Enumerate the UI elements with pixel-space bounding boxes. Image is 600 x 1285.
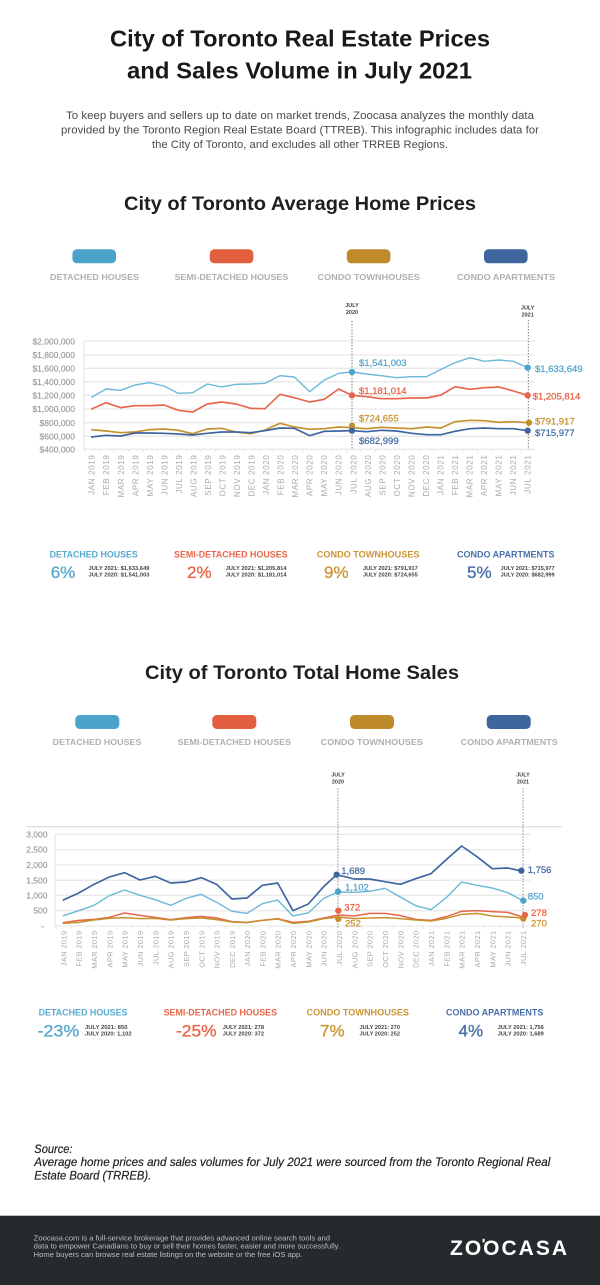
y axis labels [32,336,75,454]
line: condo apartments [63,846,521,911]
x axis month labels: AUG 2019 [167,930,176,968]
legend: average home prices: SEMI-DETACHED HOUSES [175,272,289,282]
value labels: 1,102 [345,883,369,894]
x axis month labels: OCT 2019 [218,454,228,496]
marker date labels [331,773,530,786]
x axis month labels: JAN 2020 [262,454,271,495]
x axis month labels: JAN 2021 [427,930,436,966]
value labels: 850 [528,892,544,903]
x axis month labels: JUL 2020 [335,930,344,965]
y axis labels: 500 [33,906,48,916]
y axis labels: - [41,921,44,931]
value labels: $791,917 [535,416,575,427]
stat: detached houses: 6% [51,563,75,582]
footer text: Zoocasa.com is a full-service brokerage that provides advanced online search tools and [34,1233,330,1242]
stat: semi-detached houses: 2% [187,563,212,582]
legend: total home sales: CONDO TOWNHOUSES [321,737,423,747]
y axis labels: 2,000 [26,860,48,870]
legend: total home sales: SEMI-DETACHED HOUSES [178,737,291,747]
line chart: average home prices [32,303,583,498]
stat: condo apartments: JULY 2020: 1,689 [498,1032,544,1038]
legend: total home sales: DETACHED HOUSES [53,737,142,747]
x axis month labels: JUL 2021 [524,454,533,494]
stat: condo townhouses: 9% [324,563,349,582]
legend: total home sales: CONDO APARTMENTS [461,737,558,747]
x axis month labels: DEC 2020 [412,930,421,968]
value labels: 1,756 [528,865,551,876]
stats row: total home sales [38,1008,544,1041]
x axis month labels: AUG 2019 [189,454,198,497]
stat: condo apartments [457,549,555,582]
footer text: data to empower Canadians to buy or sell their homes faster, easier and more successfully. [34,1242,340,1250]
x axis month labels: FEB 2020 [258,930,267,967]
x axis month labels: JUL 2019 [151,930,160,965]
stat: detached houses: JULY 2021: $1,633,649 [88,566,150,572]
marker date labels [345,303,535,319]
x axis month labels: DEC 2019 [248,454,256,497]
x axis month labels: FEB 2020 [277,454,286,495]
x axis month labels: JAN 2019 [88,454,97,495]
x axis month labels: MAR 2020 [274,930,283,969]
x axis month labels: APR 2019 [105,930,114,968]
stat: detached houses [50,549,150,582]
legend: average home prices: CONDO APARTMENTS [457,272,555,282]
x axis month labels: MAY 2019 [121,930,130,968]
x axis month labels: APR 2020 [289,930,298,968]
x axis month labels: JUN 2020 [320,930,329,967]
x axis month labels: JAN 2021 [436,454,445,495]
marker date labels: 2021 [517,780,529,786]
y axis labels [26,830,48,931]
x axis month labels: MAR 2021 [458,930,467,969]
stat: detached houses: JULY 2020: $1,541,003 [88,573,150,579]
stat: detached houses: JULY 2020: 1,102 [85,1032,132,1038]
value labels: $682,999 [359,436,399,447]
x axis month labels: JUN 2019 [160,454,169,495]
stats row: average home prices [50,549,555,582]
value labels [341,865,551,929]
marker date labels: JULY [331,773,345,779]
stat: detached houses [38,1008,132,1041]
value labels: $1,541,003 [359,358,407,369]
heading: total home sales: City of Toronto Total Home Sales [145,662,459,684]
stat: semi-detached houses: SEMI-DETACHED HOUSES [164,1008,277,1018]
x axis month labels: DEC 2020 [422,454,431,497]
line: detached houses [63,882,523,916]
stat: condo apartments: JULY 2020: $682,999 [501,573,555,579]
value labels: 1,689 [341,866,365,877]
y axis labels: $800,000 [40,418,75,428]
marker date labels: 2020 [332,780,344,786]
source note: Source: [34,1142,72,1156]
marker date labels: 2021 [522,313,534,319]
value labels: $1,181,014 [359,386,407,397]
line chart: total home sales [26,773,562,969]
logo: Zoocasa: ZOOCASA [450,1237,567,1260]
stat: condo apartments: CONDO APARTMENTS [457,549,554,559]
x axis month labels: NOV 2019 [213,930,222,968]
x axis month labels: APR 2020 [306,454,315,496]
x axis month labels: JUN 2020 [335,454,344,495]
marker date labels: JULY [516,773,530,779]
stat: condo townhouses: JULY 2021: 270 [360,1025,400,1031]
x axis month labels: FEB 2019 [75,930,84,967]
y axis labels: $1,600,000 [32,364,75,374]
x axis month labels: JUL 2020 [349,454,358,494]
legend: average home prices: DETACHED HOUSES [50,272,139,282]
stat: semi-detached houses: -25% [176,1022,217,1041]
x axis month labels: SEP 2020 [366,930,375,967]
intro text: To keep buyers and sellers up to date on market trends, Zoocasa analyzes the monthly data [66,110,535,122]
intro text: provided by the Toronto Region Real Estate Board (TTREB). This infographic includes data for [61,124,539,136]
y axis labels: $1,800,000 [32,350,75,360]
stat: condo apartments: JULY 2021: $715,977 [501,566,555,572]
y axis labels: $1,200,000 [32,390,75,400]
footer text [34,1233,340,1259]
x axis month labels: NOV 2020 [407,454,416,497]
x axis month labels: SEP 2020 [378,454,387,496]
stat: condo townhouses: 7% [320,1022,345,1041]
title [110,26,490,84]
title: City of Toronto Real Estate Prices [110,26,490,52]
stat: condo apartments: CONDO APARTMENTS [446,1008,543,1018]
stat: detached houses: DETACHED HOUSES [50,549,138,559]
footer text: Home buyers can browse real estate listings on the website or the free iOS app. [34,1250,302,1259]
x axis month labels: JUN 2021 [509,454,518,495]
x axis month labels: OCT 2020 [393,454,402,496]
value labels: $1,633,649 [535,364,583,375]
intro text [61,110,539,151]
x axis month labels: FEB 2021 [442,930,451,967]
y axis labels: 1,000 [26,890,48,900]
legend: average home prices: CONDO TOWNHOUSES [318,272,420,282]
y axis labels: $1,400,000 [32,377,75,387]
x axis month labels: MAY 2020 [320,454,329,496]
x axis month labels: AUG 2020 [364,454,373,497]
stat: condo townhouses [317,549,420,582]
stat: semi-detached houses: JULY 2021: 278 [223,1025,264,1031]
x axis month labels: APR 2019 [131,454,140,496]
stat: condo apartments [446,1008,544,1041]
source note: Average home prices and sales volumes for July 2021 were sourced from the Toronto Regional Real [33,1155,551,1169]
stat: condo apartments: 5% [467,563,492,582]
legend: average home prices [50,249,555,282]
y axis labels: $1,000,000 [32,404,75,414]
line: semi-detached houses [63,911,523,923]
x axis month labels: FEB 2021 [451,454,460,495]
y axis labels: 3,000 [26,830,48,840]
marker date labels: JULY [521,305,535,311]
x axis month labels: OCT 2020 [381,930,390,968]
x axis month labels: APR 2021 [480,454,489,496]
stat: condo townhouses: CONDO TOWNHOUSES [317,549,420,559]
x axis month labels: AUG 2020 [350,930,359,968]
x axis month labels: MAY 2021 [488,930,497,968]
x axis month labels: MAR 2019 [90,930,99,969]
source note [33,1142,551,1182]
x axis month labels: JUL 2021 [519,930,528,965]
x axis month labels: MAR 2019 [117,454,126,498]
stat: semi-detached houses: JULY 2020: 372 [223,1032,264,1038]
stat: condo apartments: 4% [458,1022,483,1041]
marker date labels: JULY [345,303,359,309]
title: and Sales Volume in July 2021 [127,58,472,84]
y axis labels: 1,500 [26,875,48,885]
marker date labels: 2020 [346,310,358,316]
value labels: 270 [531,918,547,929]
x axis month labels: APR 2021 [473,930,482,968]
x axis month labels: JAN 2019 [59,930,68,966]
line: semi-detached houses [92,387,528,412]
x axis month labels [59,930,528,969]
line: condo apartments [92,428,528,437]
stat: condo townhouses: JULY 2021: $791,917 [363,566,418,572]
x axis month labels: SEP 2019 [204,454,213,496]
value labels: $1,205,814 [533,391,580,402]
plot lines and markers [27,788,562,928]
source note: Estate Board (TRREB). [34,1168,151,1182]
y axis labels: $600,000 [40,432,75,442]
stat: semi-detached houses [174,549,288,582]
x axis month labels: JUL 2019 [175,454,184,494]
value labels: 372 [344,902,360,913]
stat: condo apartments: JULY 2021: 1,756 [498,1025,544,1031]
stat: condo townhouses [306,1008,409,1041]
x axis month labels: MAY 2020 [304,930,313,968]
x axis month labels: JUN 2019 [136,930,145,967]
legend: total home sales [53,715,558,747]
stat: semi-detached houses [164,1008,277,1041]
x axis month labels: MAY 2021 [495,454,504,496]
stat: condo townhouses: JULY 2020: 252 [360,1032,400,1038]
value labels: $715,977 [535,428,575,439]
value labels: 278 [531,908,547,919]
y axis labels: $400,000 [40,444,75,454]
stat: semi-detached houses: JULY 2021: $1,205,814 [226,566,288,572]
x axis month labels: NOV 2019 [233,454,242,497]
stat: detached houses: DETACHED HOUSES [39,1008,128,1018]
x axis month labels: FEB 2019 [102,454,111,495]
stat: condo townhouses: JULY 2020: $724,655 [363,573,418,579]
x axis month labels: SEP 2019 [182,930,191,967]
y axis labels: $2,000,000 [32,336,75,346]
intro text: the City of Toronto, and excludes all other TRREB Regions. [152,139,448,151]
x axis month labels: JAN 2020 [243,930,252,966]
x axis month labels: NOV 2020 [396,930,405,968]
x axis month labels: OCT 2019 [197,930,206,968]
line: detached houses [92,358,528,397]
x axis month labels [88,454,533,498]
stat: detached houses: -23% [38,1022,79,1041]
x axis month labels: JUN 2021 [504,930,513,967]
x axis month labels: MAY 2019 [146,454,155,496]
x axis month labels: DEC 2019 [228,930,237,968]
y axis labels: 2,500 [26,845,48,855]
line: condo townhouses [63,913,523,923]
stat: condo townhouses: CONDO TOWNHOUSES [306,1008,409,1018]
value labels: 252 [345,918,361,929]
stat: semi-detached houses: SEMI-DETACHED HOUSES [174,549,288,559]
footer [0,1216,600,1285]
value labels [359,358,583,447]
stat: semi-detached houses: JULY 2020: $1,181,014 [226,573,288,579]
stat: detached houses: JULY 2021: 850 [85,1025,128,1031]
x axis month labels: MAR 2020 [291,454,300,498]
x axis month labels: MAR 2021 [466,454,474,498]
plot lines and markers [84,320,535,451]
heading: average home prices: City of Toronto Average Home Prices [124,193,476,215]
value labels: $724,655 [359,413,399,424]
line: condo townhouses [92,420,528,434]
